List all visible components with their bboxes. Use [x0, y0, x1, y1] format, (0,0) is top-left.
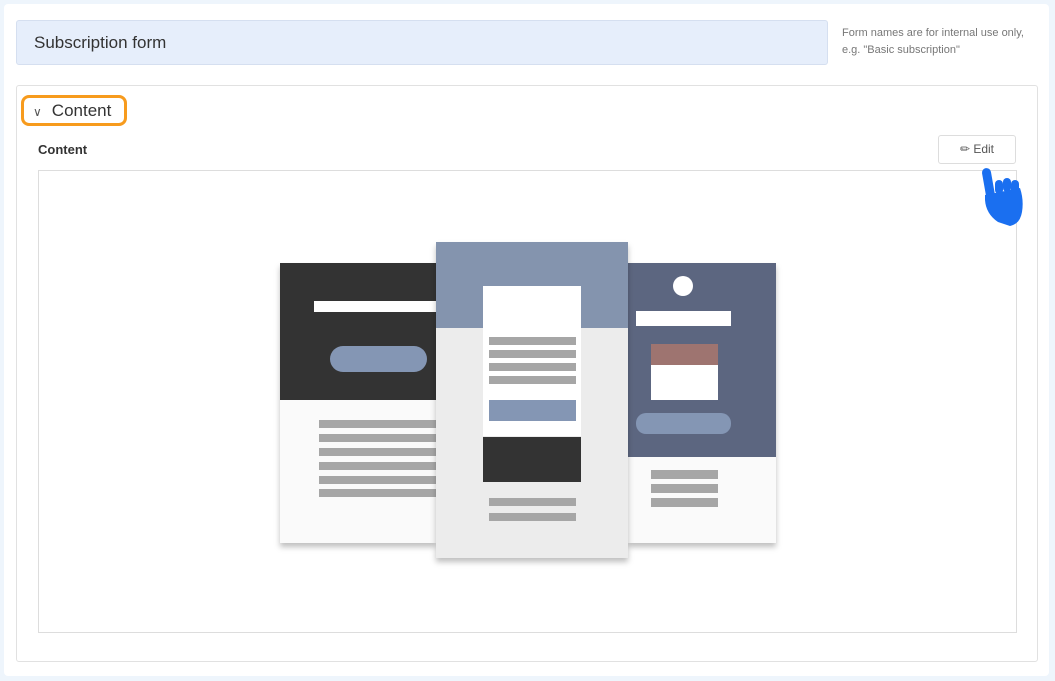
content toggle heading: ∨ Content: [33, 101, 111, 120]
form name input: [16, 20, 828, 65]
form name input: Subscription form: [34, 33, 166, 52]
hint text: Form names are for internal use only, e.g. "Basic subscription": [842, 27, 1024, 56]
content toggle heading: [21, 95, 127, 126]
preview area: [38, 170, 1017, 633]
icon: pointing hand: [981, 167, 1023, 226]
content label: Content: [38, 142, 87, 157]
edit button: [938, 135, 1016, 164]
edit button: ✏ Edit: [960, 142, 994, 156]
